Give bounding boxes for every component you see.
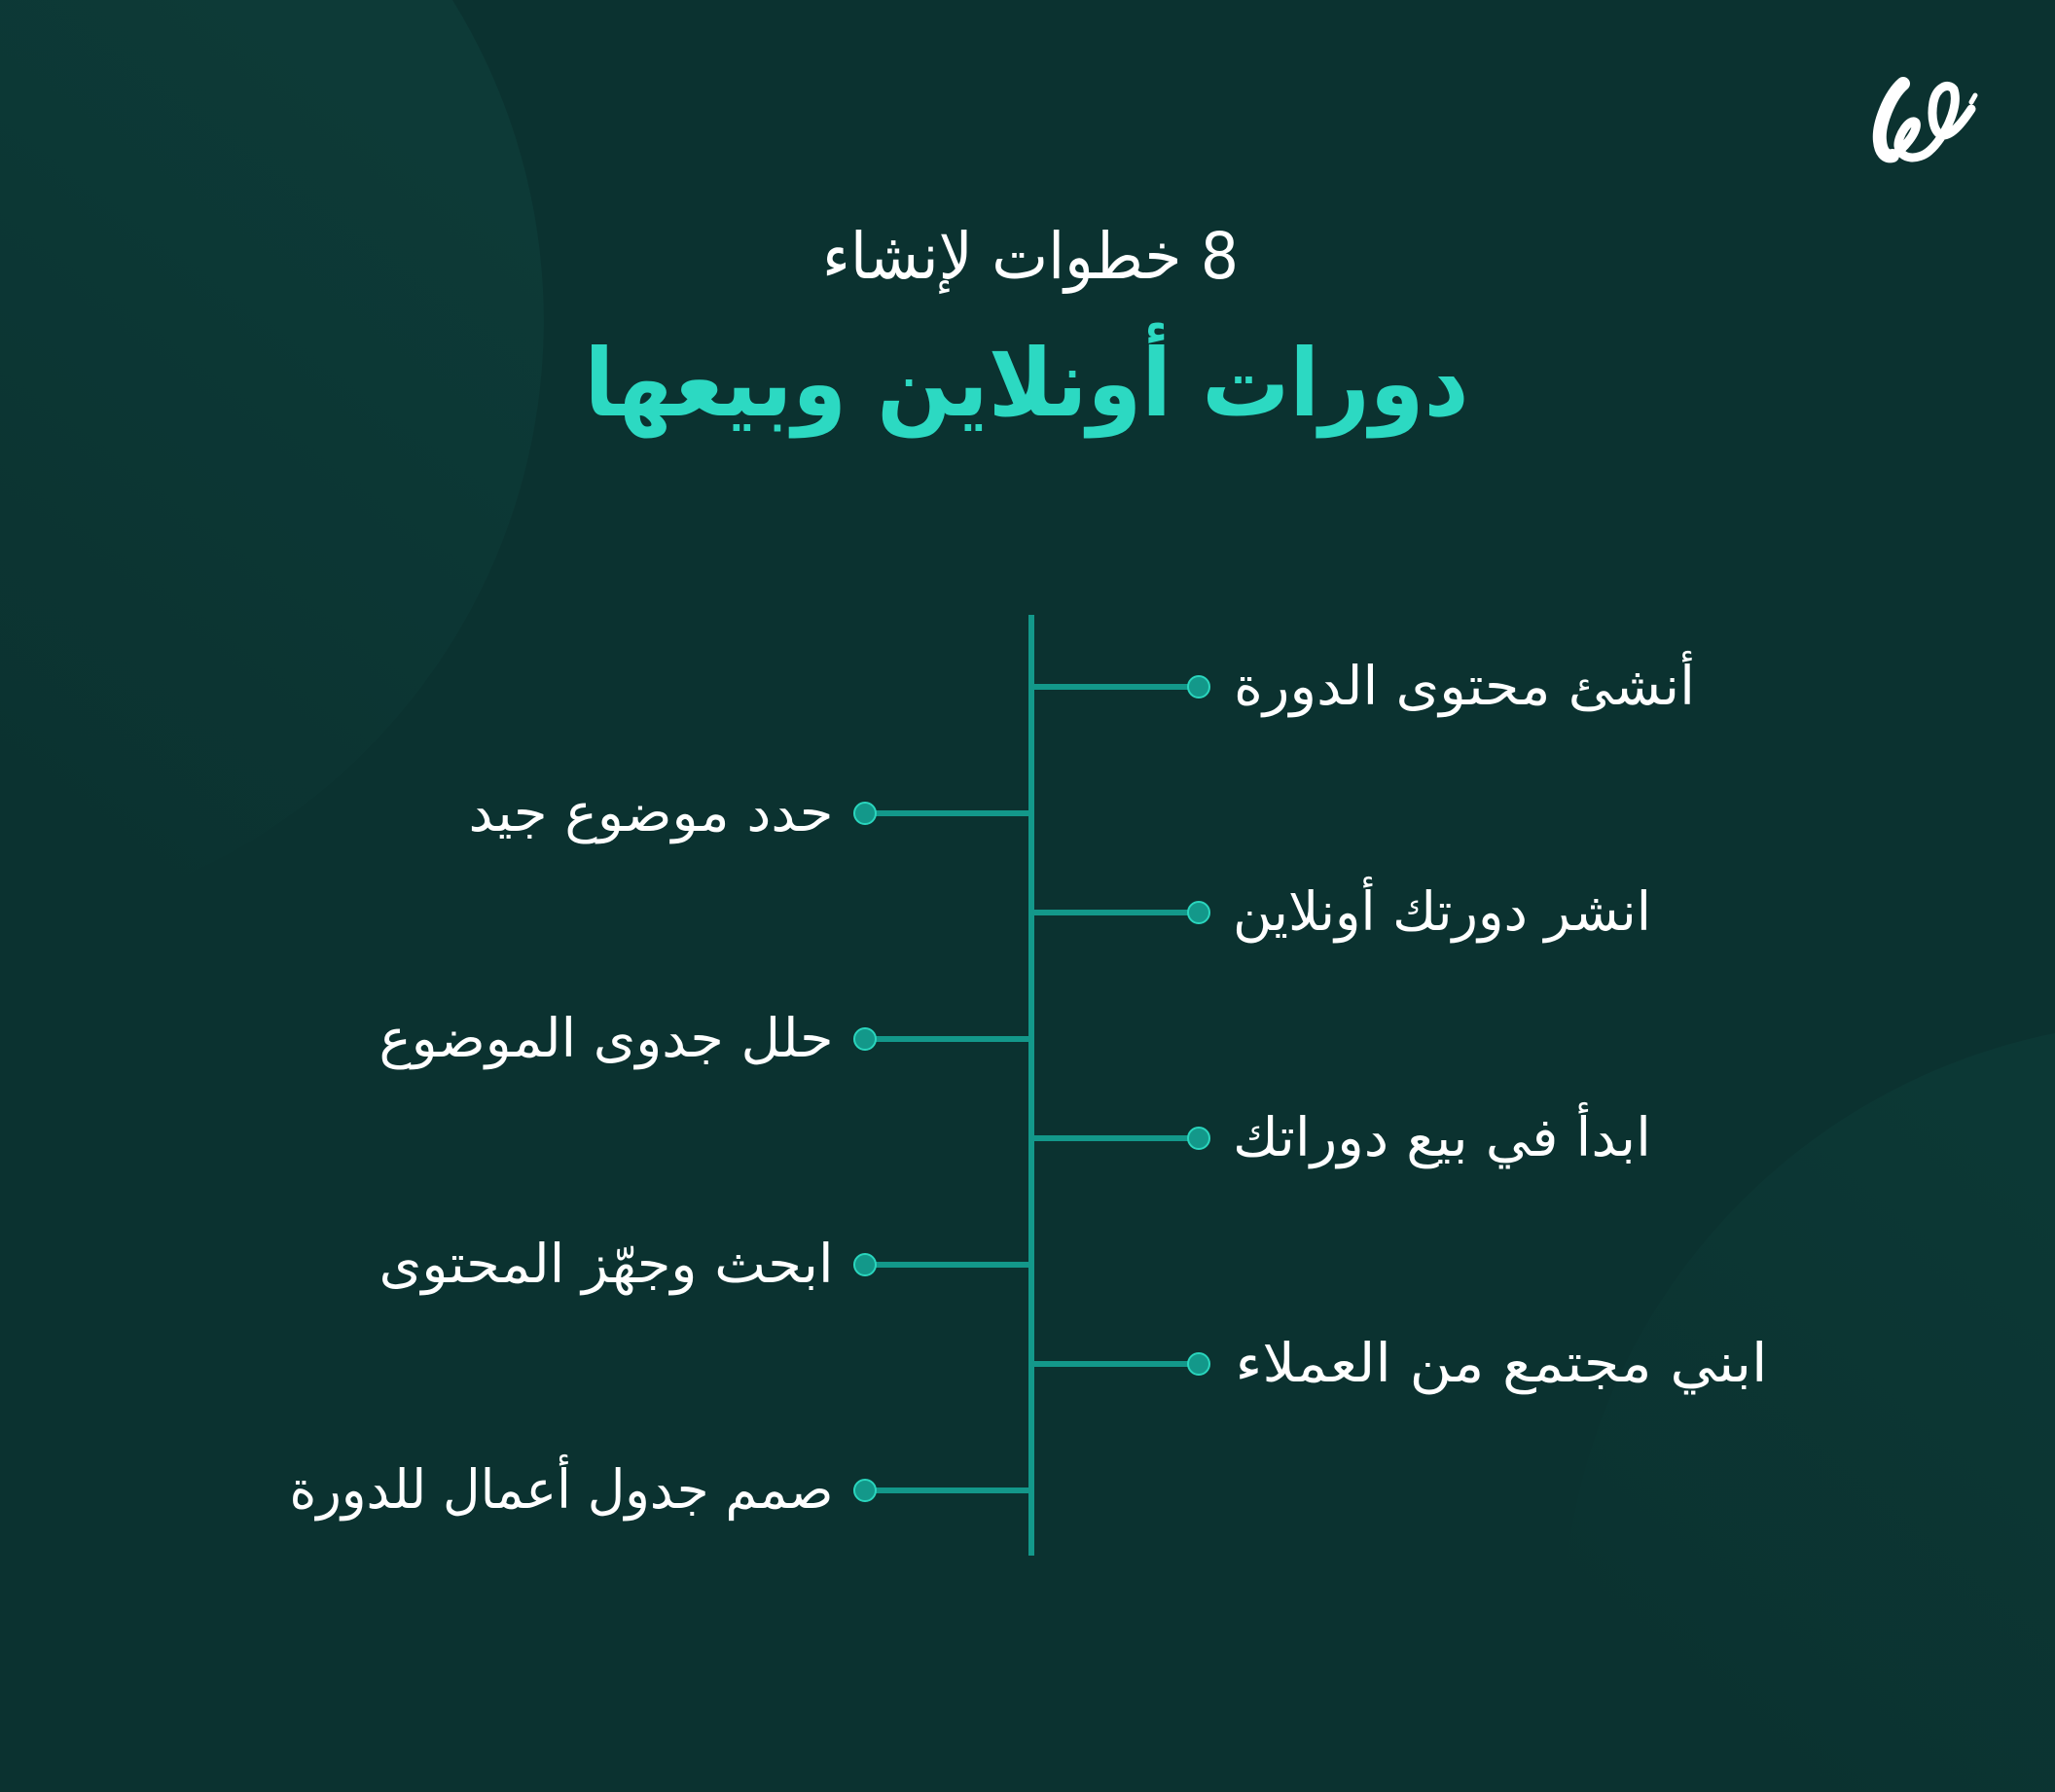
step: design course agenda: صمم جدول أعمال للدورة (290, 1454, 833, 1522)
step: build customer community (1031, 1332, 1767, 1395)
step: create course content (1031, 651, 1695, 718)
logo (1880, 84, 1975, 158)
step: research and prepare content (379, 1233, 1031, 1296)
step: build customer community: ابني مجتمع من العملاء (1236, 1332, 1767, 1395)
step: research and prepare content: ابحث وجهّز المحتوى (379, 1233, 833, 1296)
step: choose a good topic: حدد موضوع جيد (469, 781, 833, 843)
step: create course content: أنشئ محتوى الدورة (1234, 651, 1695, 718)
title line 2: دورات أونلاين وبيعها (584, 323, 1469, 439)
step: analyse topic feasibility (379, 1007, 1031, 1070)
title line 1: 8 خطوات لإنشاء (822, 219, 1239, 294)
step: start selling courses: ابدأ في بيع دوراتك (1233, 1102, 1651, 1169)
step: choose a good topic (469, 781, 1031, 843)
step: start selling courses (1031, 1102, 1651, 1169)
step: analyse topic feasibility: حلل جدوى الموضوع (379, 1007, 833, 1070)
step: publish course online (1031, 877, 1651, 944)
timeline spine (1028, 615, 1034, 1556)
step: publish course online: انشر دورتك أونلاين (1233, 877, 1651, 944)
